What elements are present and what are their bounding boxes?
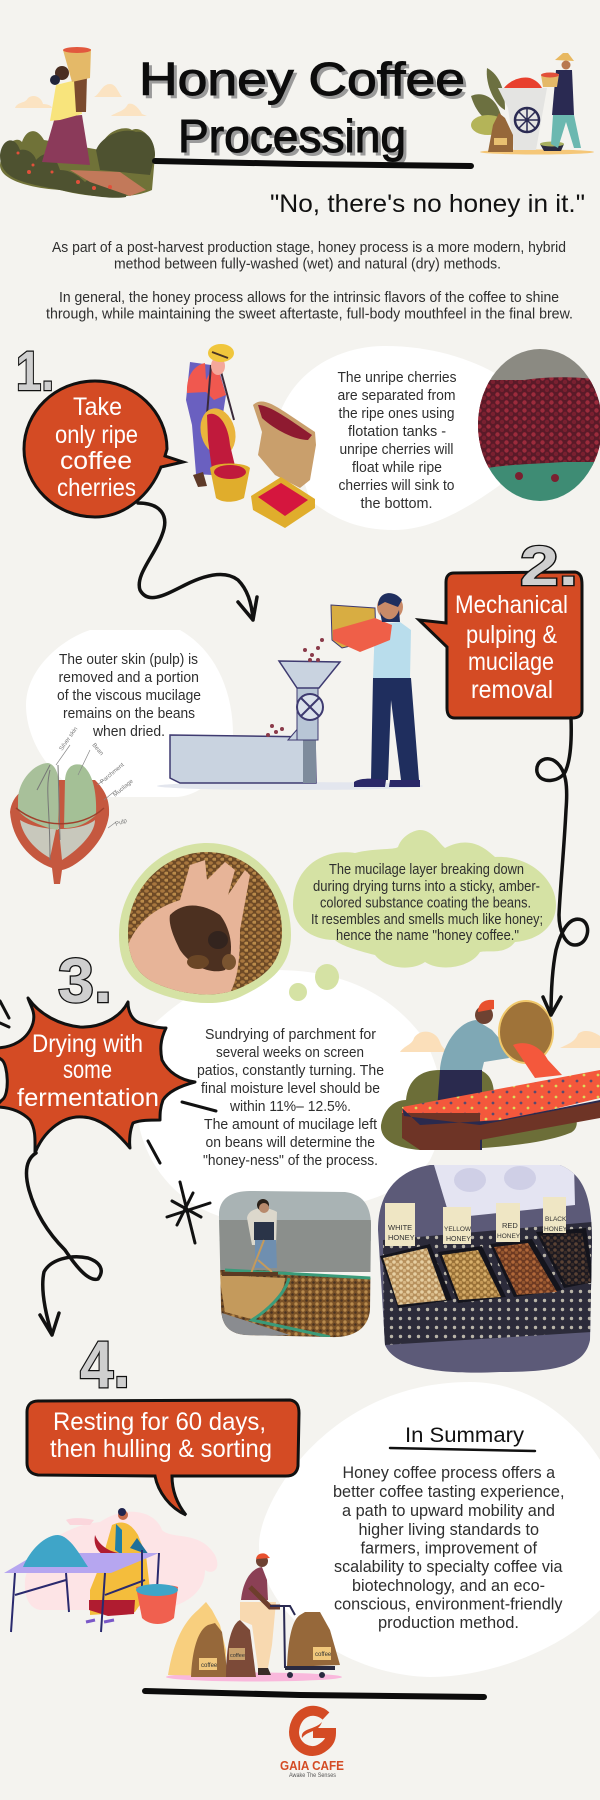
- photo: honey coffee grades: RED: [502, 1221, 518, 1230]
- title: Honey Coffee: [139, 53, 465, 105]
- text: mucilage layer: The mucilage layer breaking down: [329, 861, 524, 878]
- text: sundrying: several weeks on screen: [216, 1044, 364, 1061]
- intro text: through, while maintaining the sweet aftertaste, full-body mouthfeel in the final brew.: [46, 306, 573, 322]
- step 2 box: pulping &: [466, 621, 557, 649]
- illustration: man with coffee sacks on trolley: coffee: [201, 1663, 218, 1669]
- summary heading: [390, 1424, 535, 1451]
- text: unripe cherries: [338, 369, 456, 512]
- text: unripe cherries: The unripe cherries: [338, 369, 456, 386]
- step 2 number: 2.: [520, 534, 578, 597]
- photo: honey coffee grades: HONEY: [388, 1233, 415, 1242]
- text: mucilage layer: It resembles and smells much like honey;: [311, 911, 543, 928]
- illustration: woman sorting at table: [4, 1508, 217, 1632]
- illustration: pulping machine and worker: [157, 593, 423, 790]
- diagram: coffee cherry cross-section: Parchment: [99, 762, 126, 786]
- summary text: biotechnology, and an eco-: [352, 1576, 545, 1595]
- summary text: a path to upward mobility and: [342, 1501, 555, 1520]
- illustration: farmer sorting cherries: [186, 344, 316, 528]
- illustration: woman carrying basket in bushes: [0, 47, 155, 198]
- step 3 burst: fermentation: [17, 1084, 159, 1112]
- arrow 3 to step 4: [27, 1153, 101, 1335]
- photo: honey coffee grades: YELLOW: [444, 1226, 472, 1233]
- photo: honey beans in hand: [128, 852, 282, 994]
- summary bubble: [259, 1382, 600, 1677]
- thought bubbles: [289, 964, 339, 1001]
- summary text: farmers, improvement of: [360, 1538, 537, 1558]
- text: sundrying: Sundrying of parchment for: [205, 1026, 376, 1043]
- summary text: better coffee tasting experience,: [333, 1482, 564, 1501]
- photo: honey coffee grades: BLACK: [545, 1216, 567, 1223]
- text: sundrying: patios, constantly turning. The: [197, 1062, 384, 1079]
- text: unripe cherries: the ripe ones using: [338, 405, 454, 422]
- logo: Gaia Cafe: Awake The Senses: [289, 1773, 336, 1779]
- summary heading: In Summary: [405, 1424, 525, 1447]
- step 2 box: removal: [471, 676, 553, 704]
- burst accent strokes: [0, 1001, 216, 1163]
- step 2 box: [419, 572, 582, 718]
- text: sundrying: within 11%– 12.5%.: [229, 1098, 351, 1115]
- text: outer skin: remains on the beans: [63, 705, 195, 722]
- photo: ripe cherries: [478, 349, 600, 502]
- step 2 box: Mechanical: [455, 591, 568, 619]
- text: sundrying: on beans will determine the: [206, 1134, 375, 1151]
- text: mucilage layer: [311, 861, 543, 944]
- text: sundrying: [197, 1026, 384, 1169]
- intro text: In general, the honey process allows for the intrinsic flavors of the coffee to shine: [59, 289, 559, 306]
- text: outer skin: removed and a portion: [58, 669, 199, 686]
- intro text: As part of a post-harvest production stage, honey process is a more modern, hybrid: [52, 239, 566, 256]
- step 1 bubble: only ripe: [55, 421, 138, 449]
- step 3 burst: some: [63, 1056, 112, 1084]
- logo: Gaia Cafe: [280, 1711, 344, 1779]
- photo: raking parchment on patio: [219, 1191, 371, 1340]
- illustration: worker drying beans: [381, 1000, 600, 1150]
- illustration: coffee machine and farmer: [471, 53, 594, 154]
- text: unripe cherries: float while ripe: [352, 459, 442, 476]
- diagram: coffee cherry cross-section: Mucilage: [112, 778, 135, 799]
- diagram: coffee cherry cross-section: Silver skin: [59, 726, 79, 752]
- text: sundrying: The amount of mucilage left: [204, 1116, 378, 1133]
- step 3 number: 3.: [58, 947, 112, 1016]
- illustration: man with coffee sacks on trolley: coffee: [315, 1652, 332, 1658]
- step 4 box: then hulling & sorting: [50, 1435, 272, 1463]
- text: mucilage layer: colored substance coating the beans.: [320, 894, 531, 912]
- photo frame: honey beans in hand: [119, 843, 291, 1003]
- tagline: "No, there's no honey in it.": [270, 190, 585, 218]
- text: unripe cherries: cherries will sink to: [338, 477, 454, 494]
- title: Processing: [181, 113, 409, 165]
- step 1 bubble: cherries: [57, 474, 136, 502]
- intro text: method between fully-washed (wet) and natural (dry) methods.: [114, 256, 501, 272]
- text: unripe cherries: are separated from: [338, 387, 456, 404]
- step 3 burst: [0, 998, 195, 1153]
- green note cloud: [293, 830, 556, 968]
- step 1 bubble: [24, 381, 183, 517]
- photo: honey coffee grades: HONEY: [497, 1233, 521, 1240]
- text: unripe cherries: the bottom.: [360, 495, 432, 512]
- bubble: unripe cherries: [281, 346, 500, 530]
- step 2 box: mucilage: [468, 648, 554, 676]
- summary text: higher living standards to: [358, 1520, 539, 1539]
- title: Processing: [178, 110, 406, 162]
- text: unripe cherries: flotation tanks -: [348, 423, 446, 440]
- text: mucilage layer: during drying turns into a sticky, amber-: [313, 878, 540, 895]
- diagram: coffee cherry cross-section: Bean: [90, 742, 104, 757]
- photo: honey coffee grades: [378, 1165, 594, 1375]
- text: outer skin: of the viscous mucilage: [57, 687, 201, 704]
- bottom rule: [145, 1691, 484, 1697]
- step 4 number: 4.: [80, 1327, 130, 1401]
- step 4 box: [27, 1400, 299, 1515]
- step 1 bubble: Take: [73, 393, 122, 421]
- illustration: man with coffee sacks on trolley: [166, 1553, 342, 1682]
- summary text: production method.: [378, 1613, 519, 1632]
- summary text: Honey coffee process offers a: [342, 1463, 556, 1482]
- text: sundrying: final moisture level should be: [201, 1080, 380, 1097]
- arrow 2 to step 3: [537, 718, 588, 1015]
- step 3 burst: Drying with: [32, 1030, 143, 1058]
- photo: honey coffee grades: HONEY: [544, 1226, 568, 1233]
- arrow 1 to step 2: [138, 503, 257, 620]
- icon: star doodle: [167, 1182, 210, 1243]
- diagram: coffee cherry cross-section: [10, 726, 135, 884]
- text: sundrying: "honey-ness" of the process.: [203, 1152, 378, 1169]
- photo: honey coffee grades: HONEY: [446, 1236, 471, 1243]
- title: [139, 53, 471, 166]
- summary text: scalability to specialty coffee via: [334, 1557, 563, 1576]
- intro text: [46, 239, 573, 322]
- step 2 note bubble: [26, 630, 233, 797]
- text: outer skin: [57, 651, 201, 740]
- text: outer skin: The outer skin (pulp) is: [59, 651, 198, 668]
- diagram: coffee cherry cross-section: Pulp: [115, 818, 129, 828]
- text: unripe cherries: unripe cherries will: [340, 441, 454, 458]
- step 1 bubble: coffee: [60, 447, 132, 475]
- logo: Gaia Cafe: GAIA CAFE: [280, 1758, 344, 1773]
- text: mucilage layer: hence the name "honey coffee.": [336, 927, 519, 944]
- illustration: man with coffee sacks on trolley: coffee: [230, 1653, 245, 1659]
- step 3 note bubble: [138, 970, 443, 1223]
- summary text: [333, 1463, 564, 1632]
- photo: honey coffee grades: WHITE: [388, 1223, 412, 1232]
- step 1 number: 1.: [16, 339, 54, 402]
- title: Honey Coffee: [142, 56, 468, 108]
- summary text: conscious, environment-friendly: [334, 1594, 563, 1614]
- step 4 box: Resting for 60 days,: [53, 1408, 266, 1436]
- text: outer skin: when dried.: [92, 723, 165, 740]
